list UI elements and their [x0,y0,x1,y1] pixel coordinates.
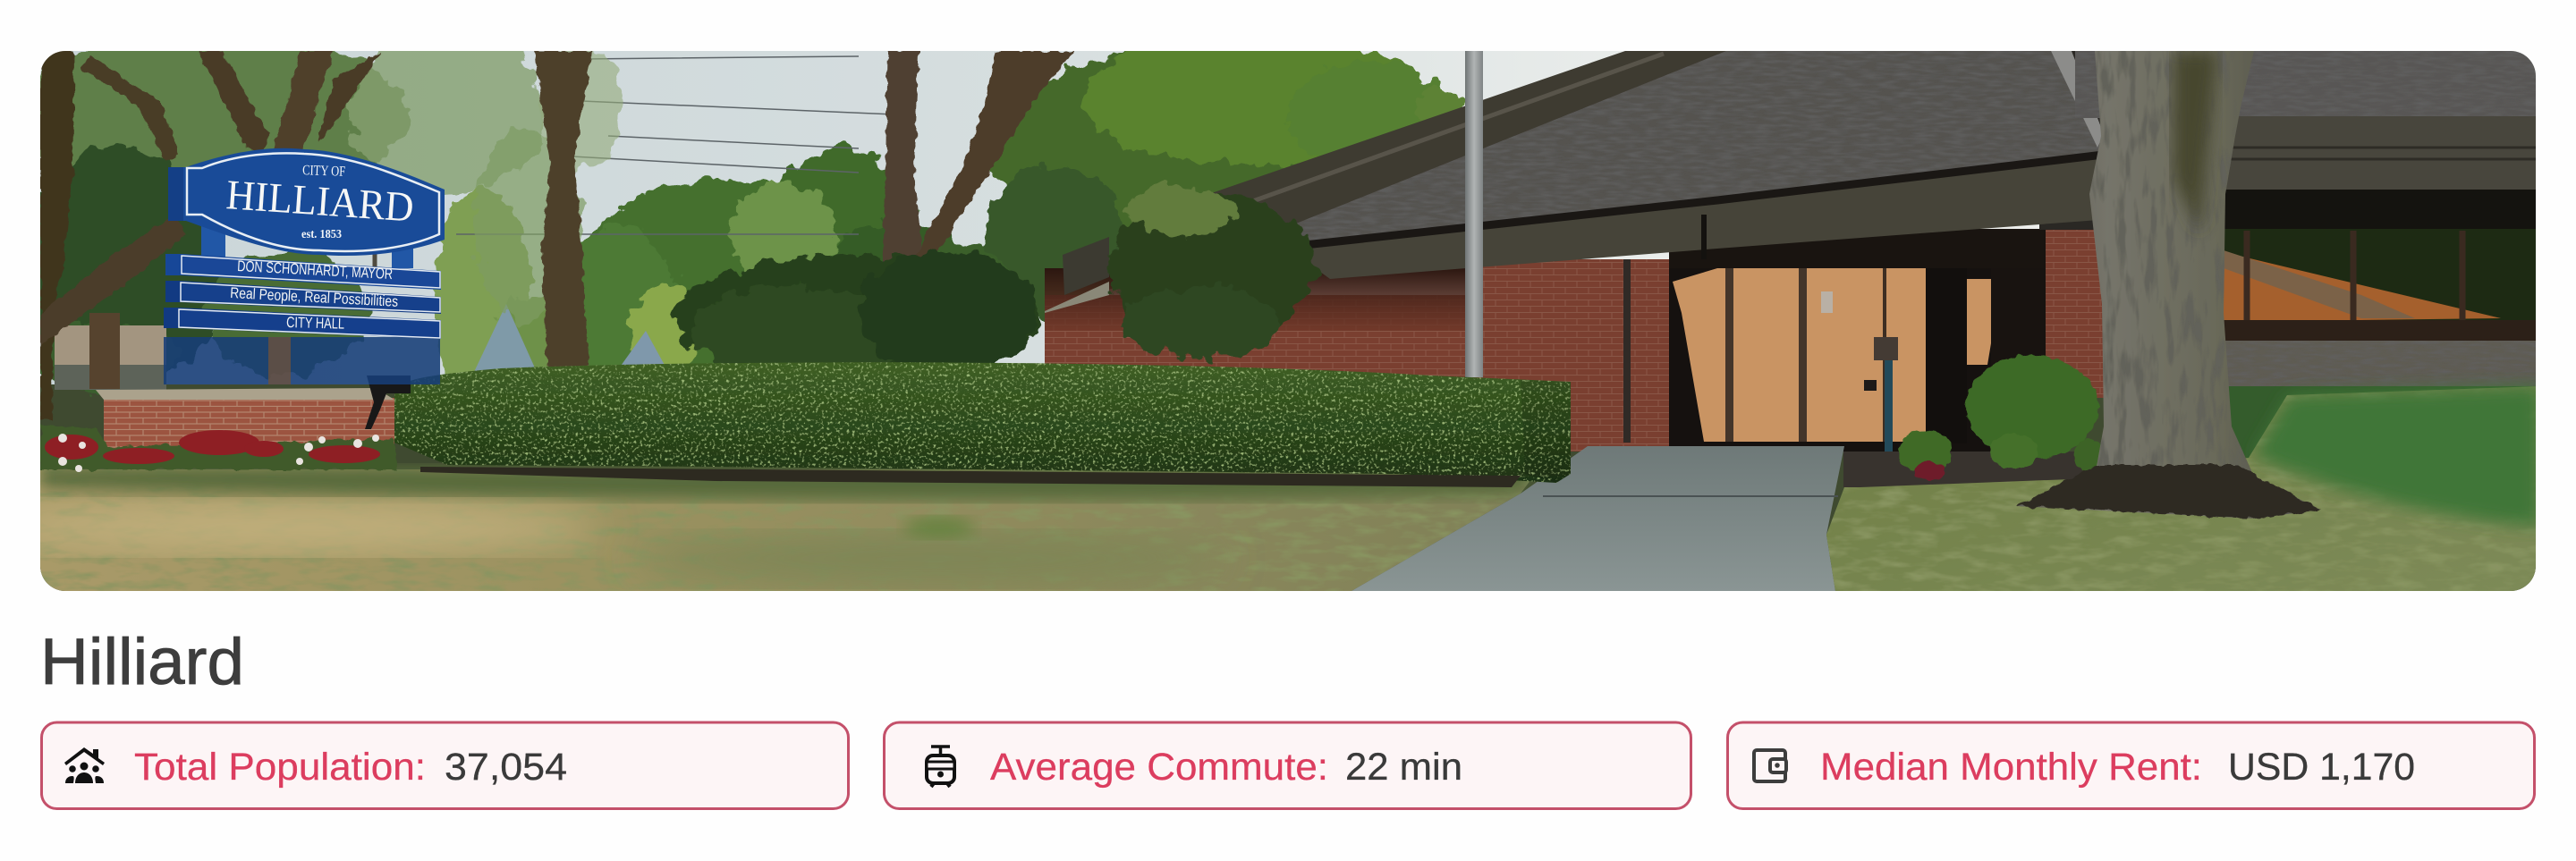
card: average commute [884,722,1690,808]
label: Average Commute: [990,746,1328,789]
sign panel: city hall [164,308,441,339]
icon: tram [927,747,954,787]
blue spruce [474,304,537,372]
city of Hilliard sign [164,148,445,384]
city of Hilliard sign: HILLIARD [225,172,415,232]
big foreground tree [2016,51,2320,519]
city of Hilliard sign: est. 1853 [301,228,342,241]
value: 37,054 [445,746,567,789]
building: gable trim [2051,51,2104,148]
left tree canopy [18,27,622,393]
shrub behind hedge [675,250,1042,380]
sign panel: mayor [165,254,441,290]
city of Hilliard sign: CITY HALL [286,314,344,333]
building: wall left of pole [1045,295,1483,384]
mesh screen [164,337,440,384]
trunk: left tree [40,51,380,420]
icon: house with people [64,747,105,783]
background shed and fence [55,325,166,365]
value: 22 min [1345,746,1462,789]
canopy behind building [951,51,1465,322]
concrete path [1352,446,1844,591]
distant trees [433,140,952,374]
trunk: mid tree [534,51,592,372]
title: Hilliard [40,626,244,698]
trunk: centre tree [882,51,1075,273]
building: entrance doors [1669,229,2049,466]
street lamp [372,163,377,266]
city of Hilliard sign: DON SCHONHARDT, MAYOR [237,257,394,283]
building: right roof [2075,51,2540,118]
icon: wallet [1754,750,1786,781]
small ornamental tree [1109,183,1315,358]
building: backing behind trunk [2039,51,2100,230]
card: total population [41,722,848,808]
flagpole [1465,51,1483,377]
building: upper fascia [1213,51,1726,224]
label: Total Population: [134,746,426,789]
building: main roof [1269,51,2111,249]
garden bed and shrubs [1843,355,2103,487]
right lawn [1826,386,2540,591]
label: Median Monthly Rent: [1820,746,2202,789]
value: USD 1,170 [2228,746,2415,789]
hedge [394,362,1571,487]
building: right wing [2224,116,2536,458]
left lawn [40,469,1538,591]
oval sign board [168,148,445,256]
city of Hilliard sign: CITY OF [302,163,346,180]
building: front fascia [1288,154,2111,279]
sign panel: slogan [165,281,441,314]
brick monument base [96,376,411,450]
card: median monthly rent [1728,722,2535,808]
building: brick wall beside entrance [1480,259,1674,452]
flower bed [40,425,397,472]
power lines [456,56,894,234]
photo: Hilliard city hall [0,27,2540,591]
city of Hilliard sign: Real People, Real Possibilities [230,284,399,310]
sign posts [201,224,413,268]
